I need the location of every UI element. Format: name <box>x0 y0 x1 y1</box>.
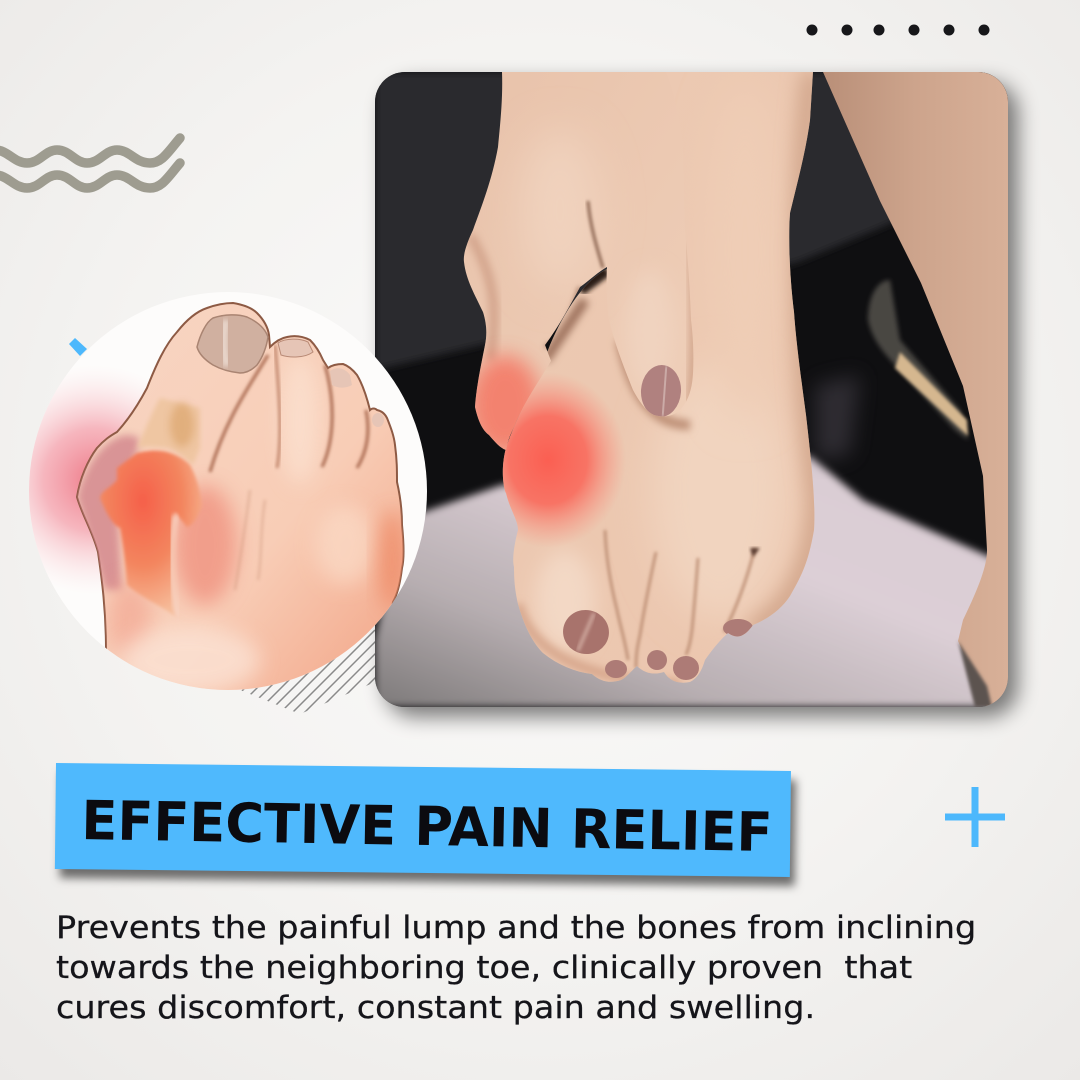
nail: big toe <box>563 610 609 654</box>
icon: dots pattern <box>806 24 990 36</box>
nail: fourth toe <box>673 656 699 680</box>
nail: third toe <box>647 650 667 670</box>
title: EFFECTIVE PAIN RELIEF <box>81 789 773 864</box>
hand <box>464 72 694 450</box>
nail: little toe <box>723 619 753 637</box>
nail: thumb <box>641 365 681 416</box>
panel: bunion illustration circle <box>0 292 427 700</box>
icon: wavy lines <box>0 138 180 188</box>
bone: metatarsal head <box>100 451 202 618</box>
decorative artwork: photo, illustration and icons <box>0 24 1032 847</box>
foot <box>502 72 814 683</box>
photo shadow <box>385 82 1018 717</box>
nail: third toe <box>330 368 352 388</box>
toe creases <box>605 530 755 668</box>
foot illustration <box>77 303 404 700</box>
icon: blue tick <box>69 338 87 356</box>
nail: big toe <box>197 315 268 373</box>
body text: Prevents the painful lump and the bones from inclining towards the neighboring toe, clinically proven that cures discomfort, constant pain and swelling. <box>56 910 976 1026</box>
icon: blue plus <box>945 787 1005 847</box>
nail: fourth toe <box>372 413 384 427</box>
hatch lines <box>242 630 375 713</box>
bone: proximal phalanx <box>137 398 200 465</box>
title banner background <box>55 763 791 877</box>
toe creases <box>210 355 368 472</box>
nail: second toe <box>278 339 313 357</box>
panel: foot photo <box>375 60 1008 707</box>
nail: second toe <box>605 660 627 678</box>
